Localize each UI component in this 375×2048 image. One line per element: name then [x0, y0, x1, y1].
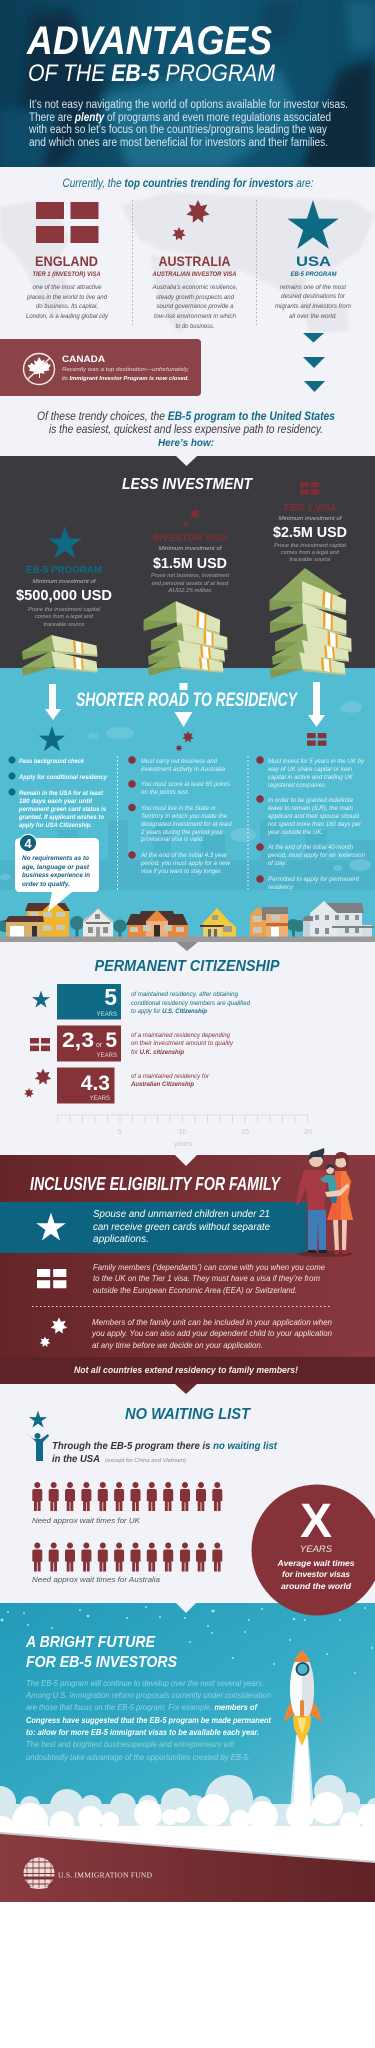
list: Australia steps: 2 years during the period your [140, 829, 224, 836]
body text: The EB-5 program will continue to develop over the next several years. [26, 1679, 264, 1688]
axis: years [174, 1139, 192, 1148]
list: UK steps: period, must apply for an ‘extension [267, 852, 366, 859]
list: Australia steps: visa if you want to stay longer. [141, 868, 222, 875]
skyline and clouds [0, 815, 375, 890]
conclusion text: Here’s how: [158, 437, 214, 449]
bar: UK: on their investment amount to quality [131, 1041, 234, 1047]
list: Australia steps: Territory in which you made the [141, 813, 228, 820]
icon: person with star [27, 1410, 49, 1461]
list: UK steps: Permitted to apply for permanent [268, 876, 359, 883]
subheading: Currently, the top countries trending for investors are: [62, 176, 314, 190]
body text: undoubtedly take advantage of the opportunities created by EB-5. [26, 1753, 250, 1762]
bar: USA: to apply for U.S. Citizenship [131, 1009, 207, 1015]
item: UK: outside the European Economic Area (EEA) or Switzerland. [93, 1286, 297, 1295]
country: USA: USA [296, 253, 331, 269]
heading [25, 1634, 177, 1671]
column: UK: Minimum investment of [278, 516, 343, 522]
bar: Australia: of a maintained residency for [131, 1074, 210, 1080]
country: USA: remains one of the most [280, 284, 346, 291]
statement: (except for China and Vietnam) [105, 1458, 186, 1464]
list: UK steps: Must invest for 5 years in the UK by [268, 758, 365, 765]
country: Australia: AUSTRALIAN INVESTOR VISA [152, 272, 236, 278]
item: USA: applications. [93, 1234, 149, 1245]
conclusion text: is the easiest, quickest and less expensive path to residency. [49, 422, 323, 436]
heading: PERMANENT CITIZENSHIP [94, 958, 280, 975]
column: Australia: INVESTOR VISA [152, 533, 228, 544]
axis: 15 [241, 1127, 249, 1136]
item: UK: Family members (‘dependants’) can come with you when you come [93, 1263, 326, 1272]
list: Australia steps: You must score at least 65 points [141, 781, 230, 788]
axis: 5 [118, 1127, 122, 1136]
country: Australia: Australia’s economic resilience, [152, 284, 238, 291]
country: USA: desired destinations for [281, 293, 346, 300]
world map backdrop [0, 192, 375, 335]
rocket [284, 1650, 322, 1810]
axis: 20 [304, 1127, 312, 1136]
country: Australia: steady growth prospects and [156, 294, 234, 301]
trees [0, 916, 305, 937]
country: USA: migrants and investors from [275, 303, 351, 310]
heading: A BRIGHT FUTURE [25, 1634, 156, 1651]
body text: The best and brightest businesspeople and entrepreneurs will [26, 1740, 234, 1749]
country: Australia [152, 200, 238, 330]
triangles [303, 333, 325, 392]
column: Australia: $1.5M USD [153, 555, 227, 572]
bar: UK [30, 1026, 234, 1062]
statement [52, 1441, 278, 1465]
country: England: London, is a leading global city [26, 313, 109, 320]
bar: USA: of maintained residency, after obtaining [131, 992, 239, 998]
panel: header [0, 0, 375, 170]
column: Australia: AUD2.25 million [167, 588, 212, 594]
list: UK steps: At the end of the initial 40-month [267, 844, 354, 851]
body text: to: allow for more EB-5 immigrant visas to be available each year. [26, 1728, 259, 1737]
column: EB-5: traceable source [44, 622, 84, 628]
body text: Among U.S. immigration reform proposals currently under consideration [25, 1691, 271, 1700]
intro text [28, 99, 348, 149]
intro text: with each so let’s focus on the countries/programs leading the way [28, 124, 327, 136]
speech bubble: business experience in [22, 872, 90, 879]
panel: less investment [0, 456, 375, 669]
callout: average wait circle [252, 1484, 375, 1616]
people row: UK [32, 1482, 222, 1511]
list: Australia steps: on the points test. [141, 789, 189, 796]
icons [39, 726, 326, 751]
column: EB-5: comes from a legal and [35, 614, 94, 620]
list: Australia steps: investment activity in Australia [141, 766, 226, 773]
title: ADVANTAGES [26, 19, 272, 63]
house 5 [250, 907, 288, 937]
bar: Australia: YEARS [90, 1096, 110, 1102]
footnote band: Not all countries extend residency to family members! [74, 1365, 298, 1376]
list: USA steps: granted. If applicant wishes to [18, 814, 104, 821]
panel: bright future [0, 1603, 375, 1870]
house 6 [302, 901, 374, 937]
callout: Canada: Recently was a top destination—unfortunately, [62, 367, 189, 373]
house 2 [83, 908, 113, 937]
country: USA: all over the world. [289, 313, 337, 320]
list: UK steps [256, 756, 366, 891]
column: EB-5: $500,000 USD [16, 587, 112, 604]
bar: UK: 5 [105, 1029, 117, 1052]
column: UK: comes from a legal and [281, 550, 340, 556]
item: Australia: at any time before we decide on your application. [92, 1341, 263, 1350]
panel: no waiting list [0, 1384, 375, 1603]
item: Australia: Members of the family unit can be included in your application when [92, 1318, 333, 1327]
list: USA steps: permanent green card status is [18, 806, 106, 813]
list: USA steps: Pass background check [19, 758, 84, 765]
list: UK steps: of stay’. [268, 860, 288, 867]
heading: NO WAITING LIST [125, 1406, 251, 1423]
list: UK steps: not spend more than 180 days per [268, 821, 362, 828]
list: USA steps [8, 756, 107, 829]
country: England: places in the world to live and [26, 294, 107, 301]
money stacks [22, 568, 353, 678]
callout: average wait circle: YEARS [300, 1544, 333, 1555]
title [26, 19, 275, 87]
list: UK steps: residency [268, 884, 294, 891]
column: UK [273, 482, 347, 563]
bar: UK: YEARS [97, 1053, 117, 1059]
list: Australia steps: period, you must apply for a new [140, 860, 231, 867]
house 4 [200, 908, 236, 937]
list: Australia steps: At the end of the initial 4.3 year [140, 852, 228, 859]
footnote band [0, 1357, 375, 1384]
body text [25, 1679, 271, 1762]
speech bubble: No requirements as to [22, 855, 89, 862]
column: EB-5: Minimum investment of [32, 579, 97, 585]
family illustration [296, 1148, 353, 1257]
callout: average wait circle: for investor visas [282, 1569, 350, 1579]
clouds [0, 1775, 375, 1870]
list: USA steps: Apply for conditional residency [18, 774, 107, 781]
list: UK steps: year outside the UK. [267, 829, 323, 836]
list: UK steps: leave to remain (ILR), the main [268, 805, 354, 812]
country: USA: EB-5 PROGRAM [290, 272, 337, 278]
column: Australia [151, 508, 229, 594]
heading: FOR EB-5 INVESTORS [26, 1654, 177, 1671]
arrow: middle [174, 683, 192, 727]
arrow: right [308, 682, 325, 727]
country: Australia: sound governance provide a [156, 303, 234, 310]
logo text: U.S. IMMIGRATION FUND [58, 1870, 153, 1880]
statement: Through the EB-5 program there is no waiting list [52, 1441, 278, 1452]
stack: UK [269, 568, 353, 678]
item: UK: to the UK on the Tier 1 visa. They must have a visa if they’re from [93, 1274, 320, 1283]
list: Australia steps [128, 756, 232, 875]
intro text: and which ones are most beneficial for investors and their families. [29, 137, 328, 149]
heading: LESS INVESTMENT [122, 476, 253, 493]
item: USA: can receive green cards without separate [93, 1222, 271, 1233]
country: England [26, 202, 109, 320]
conclusion text [37, 409, 335, 449]
list: UK steps: applicant and their spouse should [268, 813, 360, 820]
list: UK steps: In order to be granted indefinite [268, 797, 354, 804]
column: UK: $2.5M USD [273, 524, 347, 541]
bar: USA: conditional residency members are qualified [131, 1001, 251, 1007]
bar: Australia [24, 1068, 210, 1104]
item: Australia [40, 1318, 333, 1350]
panel: shorter road to residency [0, 568, 375, 942]
icon: crossed maple leaf [24, 354, 54, 384]
list: Australia steps: provisional visa is valid. [140, 836, 204, 843]
bar: Australia: 4.3 [81, 1072, 110, 1095]
caption: Australia: Need approx wait times for Australia [32, 1575, 160, 1584]
house 3 [126, 910, 188, 937]
list: USA steps: apply for USA Citizenship. [19, 822, 92, 829]
column: EB-5: Prove the investment capital [28, 607, 101, 613]
speech bubble: age, language or past [22, 864, 90, 871]
callout: Canada [0, 339, 201, 396]
number badge: 4 [24, 836, 32, 851]
column: UK: TIER 1 VISA [283, 503, 337, 514]
item: USA: Spouse and unmarried children under 21 [93, 1209, 270, 1220]
bar: Australia: Australian Citizenship [130, 1082, 194, 1088]
callout: average wait circle: X [300, 1495, 332, 1548]
column: EB-5: EB-5 PROGRAM [26, 565, 102, 576]
list: UK steps: capital in active and trading UK [268, 774, 354, 781]
heading: SHORTER ROAD TO RESIDENCY [76, 690, 299, 711]
bar: UK: for U.K. citizenship [131, 1050, 184, 1056]
country: Australia: AUSTRALIA [158, 253, 230, 269]
bar: USA: 5 [104, 984, 117, 1010]
country: England: do business. Its capital, [36, 303, 98, 310]
list: Australia steps: Must carry out business and [141, 758, 218, 765]
street of houses [0, 901, 375, 942]
arrow: left [45, 684, 61, 720]
body text: Congress have suggested that the EB-5 program be made permanent [26, 1716, 271, 1725]
column: Australia: and personal assets of at least [152, 581, 229, 587]
caption: UK: Need approx wait times for UK [32, 1516, 141, 1525]
teal band [0, 1202, 307, 1253]
panel: footer [0, 1832, 375, 1902]
bar: USA: YEARS [97, 1012, 117, 1018]
callout: average wait circle: Average wait times [277, 1558, 355, 1568]
logo: globe [23, 1858, 55, 1888]
list: USA steps: Remain in the USA for at least [19, 790, 104, 797]
column: Australia: Minimum investment of [158, 546, 223, 552]
column: UK: Prove the investment capital [274, 543, 347, 549]
country: England: TIER 1 (INVESTOR) VISA [32, 272, 100, 278]
child [320, 1164, 349, 1203]
list: Australia steps: You must live in the State or [141, 805, 217, 812]
country: England: ENGLAND [35, 253, 98, 269]
column: UK: traceable source [290, 557, 330, 563]
column: Australia: Prove net business, investment [151, 573, 229, 579]
conclusion text: Of these trendy choices, the EB-5 program to the United States [37, 409, 335, 423]
country: England: one of the most attractive [32, 284, 102, 291]
people row: Australia [32, 1542, 222, 1572]
house 1 [4, 901, 70, 937]
starfield [0, 1606, 373, 1674]
bar: UK: 2,3 [62, 1029, 94, 1052]
list: USA steps: 180 days each year until [19, 798, 92, 805]
intro text: There are plenty of programs and even more regulations associated [29, 112, 331, 124]
header photo: handshake [0, 0, 375, 170]
panel: inclusive eligibility [0, 1148, 375, 1384]
stack: Australia [143, 598, 229, 676]
bar: UK: of a maintained residency depending [131, 1033, 231, 1039]
country: Australia: low-risk environment in which [154, 313, 236, 320]
bar: USA [32, 984, 251, 1020]
speech bubble [15, 834, 99, 912]
speech bubble: order to qualify. [22, 881, 70, 888]
list: UK steps: registered companies [268, 782, 325, 789]
body text: are those that focus on the EB-5 program. For example, members of [26, 1703, 258, 1712]
callout: Canada: CANADA [62, 354, 105, 365]
list: UK steps: way of UK share capital or loan [268, 766, 353, 773]
heading: INCLUSIVE ELIGIBILITY FOR FAMILY [30, 1174, 282, 1194]
axis [57, 1115, 312, 1148]
item: Australia: you apply. You can also add your dependent child to your application [91, 1329, 333, 1338]
callout: average wait circle: around the world [281, 1581, 352, 1591]
country: USA [275, 200, 351, 392]
country: Australia: to do business. [176, 323, 214, 330]
list: Australia steps: designated investment for at least [141, 821, 232, 828]
panel: top countries [0, 167, 375, 457]
bar: UK: or [96, 1042, 103, 1049]
item: UK [37, 1263, 326, 1295]
stack: EB-5 [22, 635, 97, 676]
panel: permanent citizenship [0, 942, 375, 1155]
man [296, 1148, 327, 1253]
statement: in the USA [52, 1454, 100, 1465]
column: EB-5 [16, 526, 112, 628]
title: OF THE EB-5 PROGRAM [28, 60, 275, 87]
item: USA [36, 1209, 271, 1245]
axis: 10 [178, 1127, 187, 1136]
woman [327, 1152, 353, 1254]
callout: Canada: its Immigrant Investor Program is now closed. [62, 376, 189, 382]
